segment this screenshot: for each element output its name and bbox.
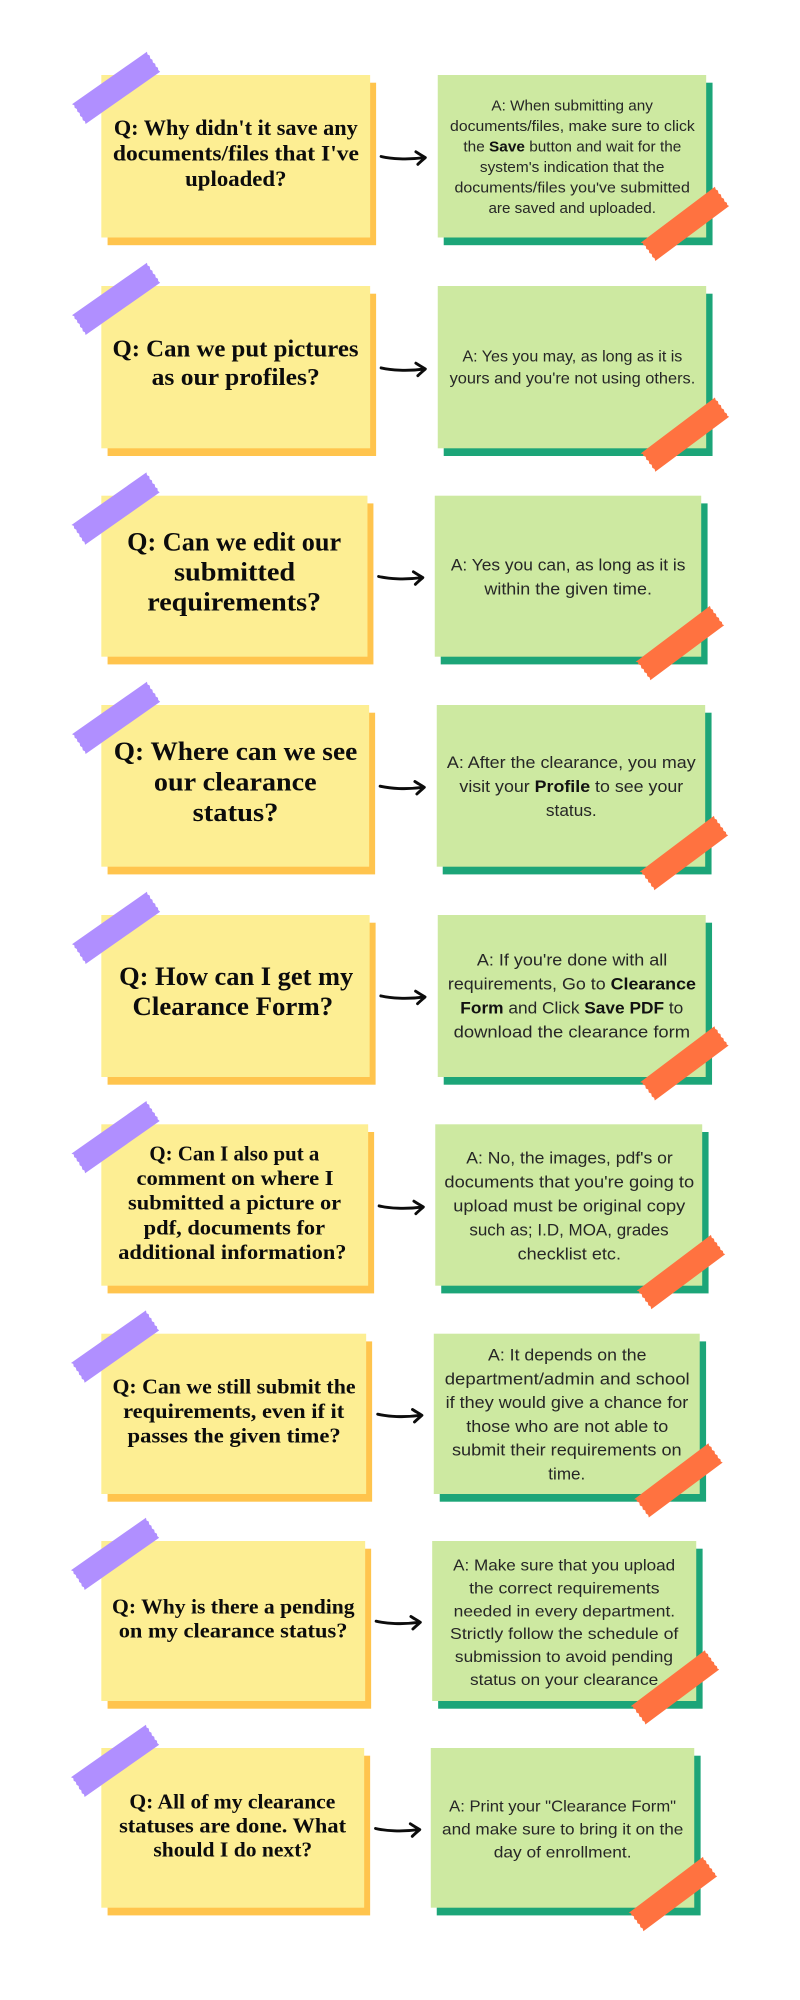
arrow 1 — [381, 152, 425, 164]
question card 2 — [101, 286, 376, 456]
FAQ row 7 — [101, 1334, 706, 1502]
question card 4 — [101, 705, 375, 874]
question text 9: Q: All of my clearance — [129, 1789, 335, 1813]
answer text 1: A: When submitting any — [491, 99, 654, 115]
FAQ row 4 — [101, 705, 712, 874]
purple tape 4 — [72, 682, 160, 754]
answer text 6: documents that you're going to — [444, 1174, 694, 1192]
question text 6 — [118, 1141, 346, 1264]
FAQ row 8 — [101, 1541, 703, 1709]
question text 7: passes the given time? — [128, 1424, 341, 1448]
purple tape 5 — [72, 892, 160, 964]
purple tape 6 — [71, 1101, 160, 1173]
FAQ row 9 — [101, 1748, 701, 1915]
question card 3 — [101, 496, 373, 664]
answer card 5 — [438, 915, 712, 1085]
answer text 1: documents/files you've submitted — [454, 180, 690, 196]
question card 9 — [101, 1748, 370, 1915]
question text 1: documents/files that I've — [113, 141, 359, 166]
question text 6: submitted a picture or — [128, 1191, 341, 1215]
question text 4 — [114, 737, 357, 827]
question text 3: requirements? — [147, 588, 321, 617]
question text 6: Q: Can I also put a — [149, 1141, 320, 1165]
question card 1 — [101, 75, 376, 245]
answer text 3: A: Yes you can, as long as it is — [451, 556, 685, 574]
answer text 3 — [451, 556, 685, 598]
question text 3 — [127, 527, 341, 617]
answer card 1 — [438, 75, 713, 245]
orange tape 2 — [641, 398, 729, 472]
question text 1 — [113, 115, 359, 191]
answer text 8: A: Make sure that you upload — [453, 1557, 675, 1574]
arrow 3 — [379, 572, 423, 584]
answer text 6: upload must be original copy — [453, 1198, 686, 1216]
answer text 1: the Save button and wait for the — [463, 140, 681, 156]
orange tape 3 — [636, 606, 724, 680]
arrow 6 — [379, 1201, 423, 1214]
question text 5 — [119, 962, 353, 1021]
question text 4: Q: Where can we see — [114, 737, 357, 766]
answer text 5: download the clearance form — [454, 1024, 690, 1042]
answer text 1: system's indication that the — [480, 160, 664, 176]
question text 2 — [112, 337, 359, 391]
answer text 8 — [450, 1557, 679, 1689]
arrow 9 — [376, 1824, 420, 1836]
orange tape 7 — [634, 1443, 723, 1518]
question card 8 — [101, 1541, 371, 1709]
purple tape 3 — [71, 472, 160, 545]
orange tape 9 — [629, 1857, 717, 1931]
question card 7 — [101, 1334, 372, 1502]
answer text 8: Strictly follow the schedule of — [450, 1626, 679, 1643]
answer text 8: status on your clearance — [470, 1672, 658, 1689]
question text 9: should I do next? — [153, 1838, 312, 1862]
answer text 6: A: No, the images, pdf's or — [466, 1150, 673, 1168]
FAQ row 5 — [101, 915, 712, 1085]
question text 5: Q: How can I get my — [119, 962, 353, 991]
answer text 9: day of enrollment. — [494, 1844, 632, 1861]
answer text 9 — [442, 1799, 683, 1861]
question text 4: status? — [193, 798, 278, 827]
answer text 7: if they would give a chance for — [446, 1394, 689, 1412]
answer text 9: and make sure to bring it on the — [442, 1822, 683, 1839]
question text 3: submitted — [174, 558, 296, 587]
answer text 5: A: If you're done with all — [477, 952, 667, 970]
orange tape 6 — [637, 1235, 725, 1309]
question text 6: comment on where I — [137, 1166, 334, 1190]
FAQ row 3 — [101, 496, 708, 664]
question text 2: Q: Can we put pictures — [112, 337, 359, 363]
arrow 2 — [381, 363, 425, 376]
question text 9 — [119, 1789, 346, 1862]
orange tape 1 — [641, 187, 729, 261]
question text 6: pdf, documents for — [144, 1215, 325, 1239]
question text 8: Q: Why is there a pending — [112, 1594, 355, 1618]
answer card 2 — [438, 286, 713, 456]
answer text 6 — [444, 1150, 694, 1264]
answer card 9 — [431, 1748, 701, 1915]
FAQ row 6 — [101, 1124, 709, 1293]
answer text 7: A: It depends on the — [488, 1346, 646, 1364]
question text 4: our clearance — [154, 768, 317, 797]
answer text 2: A: Yes you may, as long as it is — [463, 349, 682, 366]
question text 7: requirements, even if it — [123, 1399, 344, 1423]
answer text 6: such as; I.D, MOA, grades — [469, 1222, 669, 1240]
question text 1: uploaded? — [185, 166, 287, 191]
purple tape 8 — [71, 1518, 159, 1590]
answer card 4 — [437, 705, 712, 874]
answer text 5 — [448, 952, 696, 1042]
answer text 4: visit your Profile to see your — [459, 778, 684, 796]
answer text 5: Form and Click Save PDF to — [460, 1000, 683, 1018]
answer text 2: yours and you're not using others. — [450, 370, 695, 387]
answer text 2 — [450, 349, 695, 387]
question text 6: additional information? — [118, 1240, 346, 1264]
purple tape 1 — [72, 52, 160, 124]
question text 2: as our profiles? — [152, 365, 320, 391]
question text 9: statuses are done. What — [119, 1814, 346, 1838]
answer text 3: within the given time. — [483, 580, 652, 598]
answer card 6 — [435, 1124, 709, 1293]
answer text 4 — [447, 754, 697, 820]
answer card 3 — [435, 496, 708, 664]
question text 7 — [112, 1374, 356, 1448]
arrow 5 — [381, 991, 425, 1004]
question text 8 — [112, 1594, 355, 1643]
answer text 9: A: Print your "Clearance Form" — [449, 1799, 676, 1816]
answer text 7: submit their requirements on — [452, 1442, 682, 1460]
answer text 8: needed in every department. — [454, 1603, 675, 1620]
purple tape 9 — [71, 1725, 159, 1797]
answer text 5: requirements, Go to Clearance — [448, 976, 696, 994]
answer text 6: checklist etc. — [518, 1246, 621, 1264]
answer text 4: A: After the clearance, you may — [447, 754, 697, 772]
question text 7: Q: Can we still submit the — [112, 1374, 356, 1398]
answer text 4: status. — [546, 802, 597, 820]
answer text 7 — [445, 1346, 690, 1483]
answer text 7: those who are not able to — [466, 1418, 668, 1436]
FAQ row 2 — [101, 286, 713, 456]
orange tape 4 — [640, 816, 728, 890]
purple tape 7 — [71, 1310, 159, 1383]
answer text 7: time. — [548, 1465, 585, 1483]
answer card 7 — [434, 1334, 706, 1502]
arrow 4 — [380, 782, 424, 794]
question card 5 — [101, 915, 376, 1085]
arrow 8 — [376, 1616, 420, 1629]
question text 5: Clearance Form? — [133, 992, 333, 1021]
question text 3: Q: Can we edit our — [127, 527, 341, 556]
answer text 1: documents/files, make sure to click — [450, 119, 696, 135]
answer text 8: submission to avoid pending — [455, 1649, 673, 1666]
answer card 8 — [432, 1541, 703, 1709]
answer text 7: department/admin and school — [445, 1370, 690, 1388]
purple tape 2 — [72, 263, 160, 335]
question card 6 — [101, 1124, 374, 1293]
FAQ row 1 — [101, 75, 713, 245]
orange tape 8 — [631, 1650, 719, 1724]
answer text 1 — [450, 99, 696, 217]
answer text 1: are saved and uploaded. — [488, 201, 656, 217]
answer text 8: the correct requirements — [469, 1580, 660, 1597]
arrow 7 — [378, 1410, 422, 1422]
orange tape 5 — [640, 1026, 729, 1100]
question text 8: on my clearance status? — [119, 1619, 347, 1643]
question text 1: Q: Why didn't it save any — [114, 115, 358, 140]
